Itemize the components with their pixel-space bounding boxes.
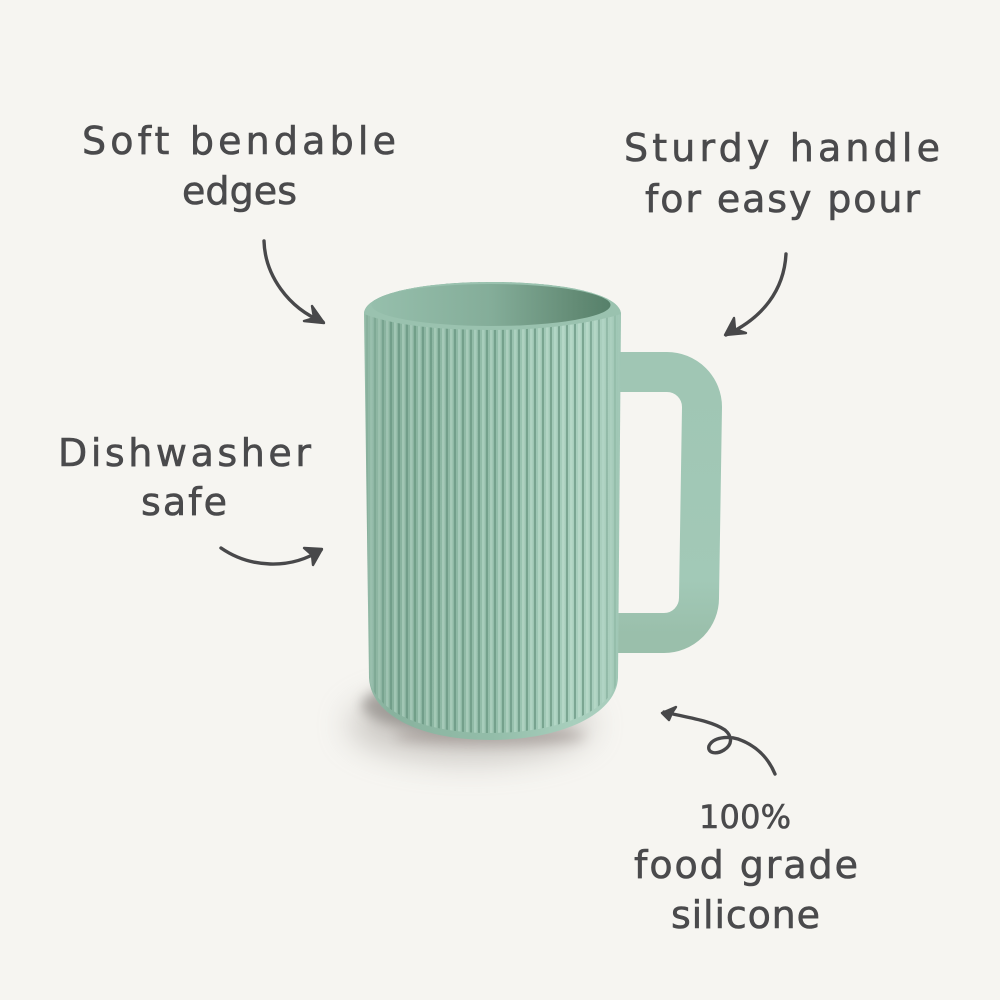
label: food grade silicone	[634, 798, 858, 937]
mug body	[364, 282, 621, 740]
mug shadow	[348, 679, 592, 761]
arrow: sturdy handle	[725, 254, 786, 335]
mug photo	[348, 282, 702, 761]
label: dishwasher safe: Dishwasher	[58, 431, 311, 475]
label: sturdy handle: Sturdy handle	[624, 126, 940, 170]
arrow: food grade	[662, 707, 775, 774]
label: food grade silicone: food grade	[634, 843, 858, 887]
label: food grade silicone: 100%	[699, 798, 791, 836]
label: soft bendable edges: edges	[182, 169, 297, 213]
mug opening	[372, 284, 610, 326]
arrow: dishwasher safe	[221, 548, 322, 565]
mug rim	[364, 282, 621, 330]
label: dishwasher safe: safe	[141, 480, 227, 524]
arrow: soft bendable edges	[264, 241, 324, 323]
label: soft bendable edges	[82, 119, 396, 213]
label: dishwasher safe	[58, 431, 311, 524]
label: soft bendable edges: Soft bendable	[82, 119, 396, 163]
label: food grade silicone: silicone	[671, 893, 820, 937]
mug handle	[616, 372, 702, 633]
label: sturdy handle	[624, 126, 940, 221]
label: sturdy handle: for easy pour	[645, 177, 920, 221]
